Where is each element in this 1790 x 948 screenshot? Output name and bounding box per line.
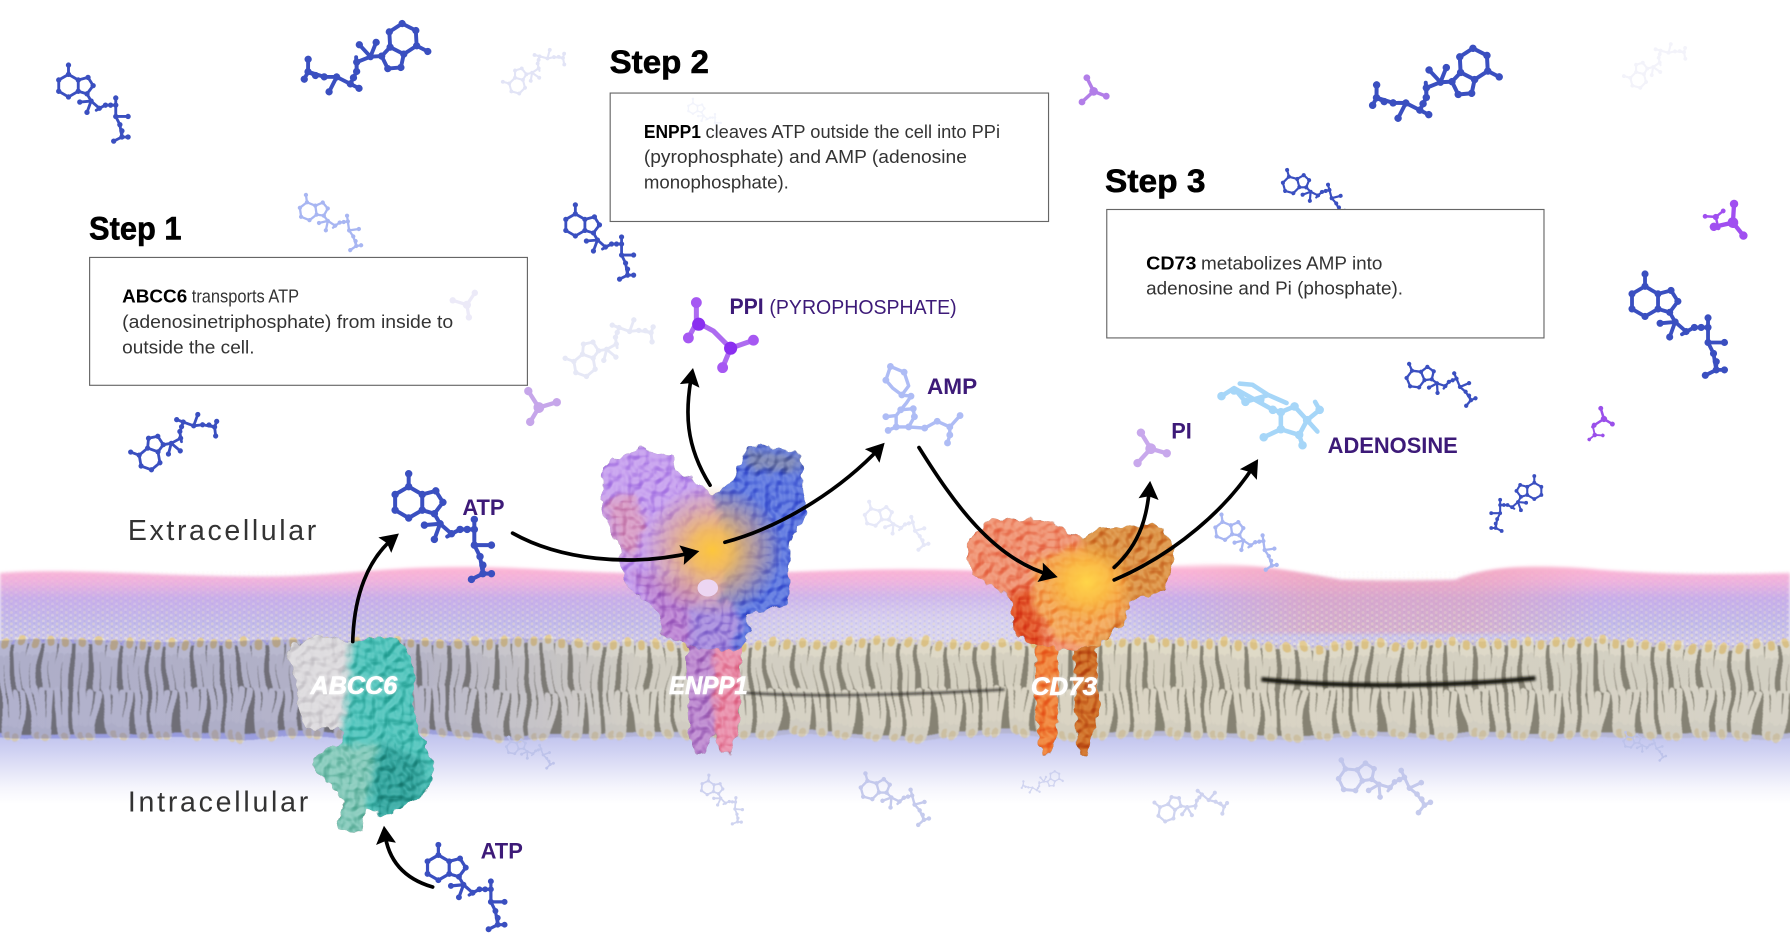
ENPP1 transmembrane legs — [687, 639, 740, 753]
molecule: adenosine — [1221, 384, 1320, 445]
step 2 text: cleaves ATP outside the cell into PPi — [705, 121, 1000, 142]
CD73 transmembrane legs — [1035, 634, 1098, 755]
molecule: Pi — [1135, 431, 1167, 463]
step 2 heading: Step 2 — [610, 44, 709, 80]
membrane: top lipid surface — [0, 563, 1790, 656]
faint molecule behind step 2 text — [688, 99, 721, 134]
arrow: CD73 to adenosine — [1114, 465, 1255, 580]
protein: ENPP1 — [602, 445, 806, 753]
step 1 text: ABCC6 — [122, 286, 187, 307]
step 3 heading: Step 3 — [1105, 163, 1206, 199]
arrow: AMP to CD73 — [919, 448, 1051, 575]
ENPP1 active-site glow — [642, 484, 783, 616]
label: adenosine: ADENOSINE — [1328, 433, 1458, 458]
molecules: dark blue ATP scattered — [59, 0, 1724, 531]
arrow: intracellular ATP to ABCC6 — [385, 832, 433, 887]
label: PPi: PPI — [729, 294, 764, 319]
step 1 box — [90, 257, 527, 385]
faint background molecules: extracellular — [298, 35, 1688, 576]
step 3 text: CD73 — [1146, 252, 1196, 273]
panel: step 2 — [610, 44, 1049, 221]
molecule: ATP extracellular — [395, 474, 491, 579]
protein label: CD73: CD73 — [1031, 673, 1097, 701]
arrow: ABCC6 to ATP — [353, 538, 394, 642]
arrow: ENPP1 to PPi — [688, 374, 710, 485]
faint background molecules: intracellular — [504, 722, 1667, 846]
molecule: AMP — [886, 366, 960, 443]
step 3 text — [1146, 252, 1403, 299]
step 2 text: ENPP1 — [644, 121, 701, 142]
label: ATP intracellular: ATP — [481, 838, 523, 863]
protein: CD73 — [967, 518, 1176, 755]
membrane: shadow under bilayer — [0, 721, 1790, 804]
panel: step 1 — [89, 211, 527, 385]
label: Intracellular: Intracellular — [128, 787, 309, 819]
step 1 text — [122, 286, 453, 357]
ENPP1 body lobes — [602, 445, 806, 651]
step 3 text: adenosine and Pi (phosphate). — [1146, 278, 1403, 299]
step 2 text: (pyrophosphate) and AMP (adenosine — [644, 146, 967, 167]
step 1 text: outside the cell. — [122, 336, 255, 357]
step 1 text: transports ATP — [192, 286, 299, 307]
molecules: phosphate scattered — [523, 78, 1755, 444]
step 3 box — [1107, 209, 1544, 338]
arrow: ATP to ENPP1 — [513, 533, 693, 560]
pathway arrows — [353, 374, 1255, 887]
faint molecule over step 1 box — [453, 289, 484, 320]
molecule: PPi — [688, 303, 753, 368]
protein: ABCC6 — [287, 635, 435, 833]
label: Pi: PI — [1171, 418, 1192, 443]
ENPP1 pocket — [698, 579, 718, 596]
label: Extracellular: Extracellular — [128, 515, 317, 547]
CD73 body lobes — [967, 518, 1176, 648]
label: AMP: AMP — [927, 374, 977, 399]
CD73 active-site glow — [1039, 539, 1135, 626]
panel: step 3 — [1105, 163, 1544, 338]
step 2 text — [644, 121, 1000, 192]
label: PPi: (PYROPHOSPHATE) — [769, 296, 957, 319]
molecule: ATP intracellular — [428, 845, 505, 929]
arrow: ENPP1 to AMP — [725, 448, 880, 542]
protein label: ABCC6: ABCC6 — [310, 672, 398, 700]
label: ATP extracellular: ATP — [462, 495, 505, 520]
arrow: CD73 to Pi — [1114, 487, 1150, 567]
step 2 text: monophosphate). — [644, 171, 789, 192]
step 2 box — [610, 93, 1049, 221]
step 1 text: (adenosinetriphosphate) from inside to — [122, 311, 453, 332]
step 1 heading: Step 1 — [89, 211, 182, 247]
membrane: lipid bilayer — [0, 634, 1790, 744]
step 3 text: metabolizes AMP into — [1201, 252, 1382, 273]
protein label: ENPP1: ENPP1 — [669, 672, 748, 700]
